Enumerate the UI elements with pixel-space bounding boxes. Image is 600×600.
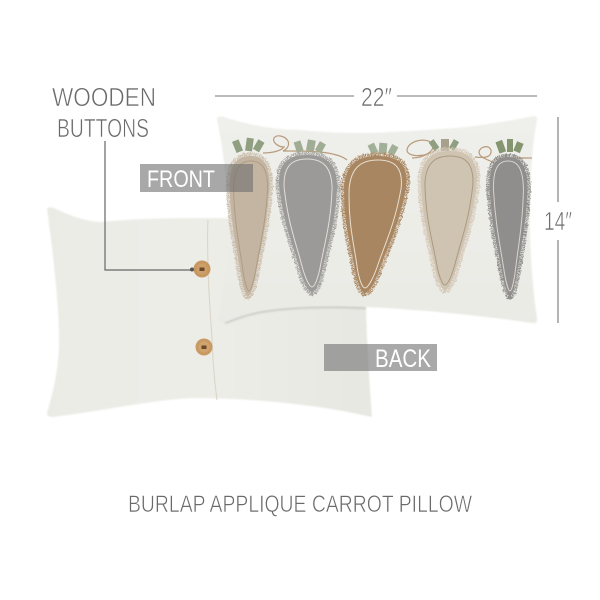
- back pillow: [47, 207, 372, 417]
- wooden buttons label: [52, 82, 156, 143]
- carrot 2 grey: [278, 139, 341, 292]
- twine loops: [263, 136, 532, 163]
- back pillow placket seam: [208, 220, 217, 400]
- front label: [140, 164, 253, 193]
- height dimension: 14 inches: 14″: [544, 206, 572, 236]
- carrot 5 dark grey: [489, 139, 529, 296]
- back label: [324, 344, 437, 373]
- carrot 3 brown: [334, 143, 409, 293]
- front label: FRONT: [147, 166, 215, 193]
- lower wooden button: [196, 338, 212, 356]
- wooden buttons label: BUTTONS: [57, 113, 149, 143]
- leader line to button: [105, 141, 194, 272]
- wooden buttons label: WOODEN: [52, 82, 156, 112]
- carrot 1 tan: [228, 138, 270, 296]
- front pillow: [217, 116, 537, 323]
- carrot 4 beige: [417, 139, 478, 290]
- upper wooden button: [194, 260, 210, 278]
- product title: BURLAP APPLIQUE CARROT PILLOW: [128, 491, 472, 518]
- width dimension: 22 inches: 22″: [361, 82, 392, 112]
- back label: BACK: [375, 345, 431, 373]
